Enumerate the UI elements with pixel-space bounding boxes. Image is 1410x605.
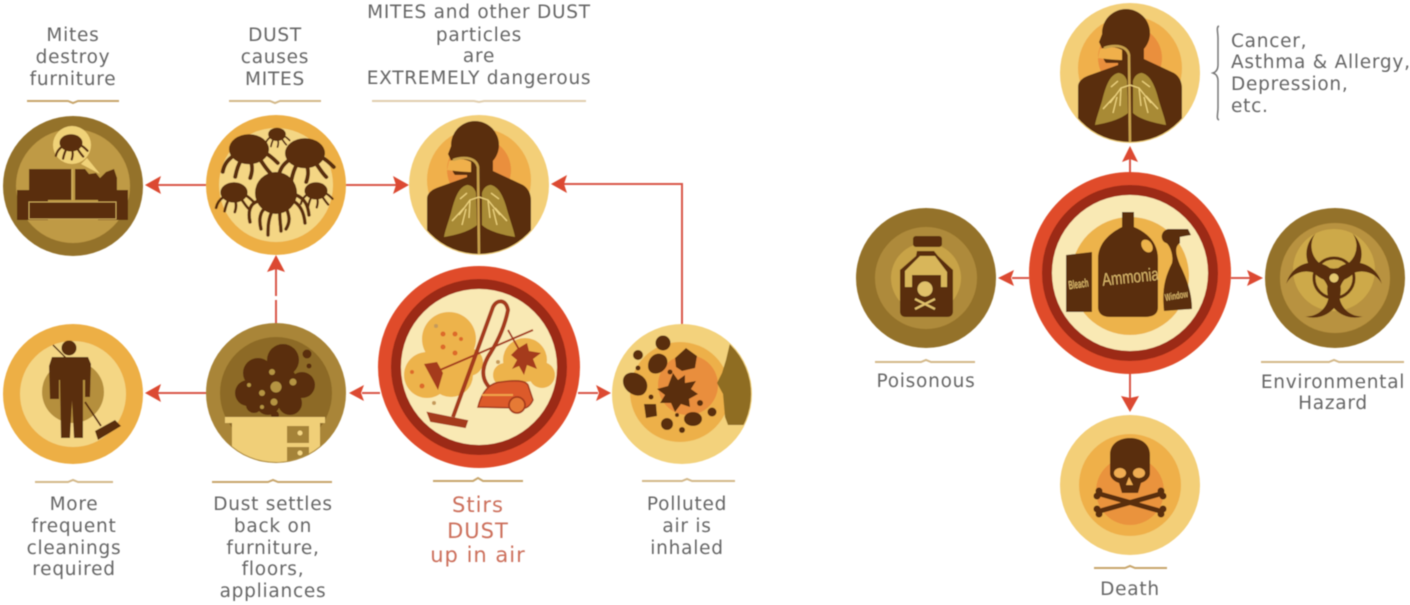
heading: mites destroy furniture: Mites <box>46 25 100 46</box>
arrow: dust causes mites to dangerous lungs <box>346 176 409 194</box>
icon: poison bottle <box>856 208 996 348</box>
arrow: dust causes mites to mites destroy furniture <box>145 176 206 194</box>
icon: dust mites <box>206 115 346 255</box>
arrow: chemicals to health <box>1122 146 1138 173</box>
text: more frequent cleanings: More <box>50 494 98 515</box>
heading: mites destroy furniture: furniture <box>30 69 116 90</box>
divider: dangerous label <box>372 101 586 102</box>
icon: biohazard <box>1265 208 1405 348</box>
divider: poisonous label <box>875 360 975 362</box>
text: health effects list: Cancer, <box>1231 31 1307 52</box>
divider: death label <box>1094 566 1167 568</box>
text: polluted air inhaled: air is <box>662 516 712 537</box>
text: health effects list: Asthma & Allergy, <box>1231 52 1410 73</box>
heading: mites extremely dangerous <box>367 2 591 89</box>
text: stirs dust up in air: DUST <box>447 519 509 543</box>
text: poisonous: Poisonous <box>876 371 976 392</box>
arrow: chemicals to poisonous <box>998 270 1029 286</box>
text: stirs dust up in air <box>430 493 526 567</box>
text: death: Death <box>1100 579 1160 600</box>
heading: dust causes mites <box>241 25 309 90</box>
arrow: dust settles to more cleanings <box>145 384 206 402</box>
text: stirs dust up in air: up in air <box>430 543 526 567</box>
text: health effects list <box>1231 31 1410 117</box>
icon: human lungs health effects <box>1060 3 1200 145</box>
text: dust settles: back on <box>234 516 312 537</box>
divider: stirs dust label <box>433 478 523 481</box>
divider: furniture label <box>27 101 119 103</box>
text: dust settles: Dust settles <box>213 494 333 515</box>
arrow: vacuum to polluted air <box>578 385 611 401</box>
icon: cleaning chemicals: Ammonia <box>1101 264 1161 290</box>
text: health effects list: etc. <box>1231 96 1269 117</box>
text: more frequent cleanings: frequent <box>32 516 116 537</box>
text: dust settles: appliances <box>220 581 326 602</box>
left flow diagram <box>3 2 757 602</box>
divider: environmental hazard label <box>1261 360 1404 362</box>
icon: cleaning chemicals <box>1029 172 1231 374</box>
heading: mites extremely dangerous: EXTREMELY dangerous <box>367 68 591 89</box>
heading: dust causes mites: MITES <box>245 69 305 90</box>
arrow: chemicals to environmental hazard <box>1231 270 1263 286</box>
text: polluted air inhaled: Polluted <box>647 494 727 515</box>
heading: dust causes mites: causes <box>241 47 309 68</box>
divider: polluted air label <box>642 479 735 481</box>
heading: mites destroy furniture <box>30 25 116 90</box>
icon: person cleaning <box>3 324 143 464</box>
heading: mites extremely dangerous: MITES and other DUST <box>367 2 591 23</box>
icon: sofa with mite <box>3 116 143 256</box>
text: dust settles <box>213 494 333 602</box>
divider: cleanings label <box>35 480 113 482</box>
icon: dust settled on furniture <box>206 323 346 463</box>
icon: polluted air inhaled <box>612 324 757 464</box>
arrow: dust settles up to mites <box>267 255 285 324</box>
heading: mites extremely dangerous: are <box>463 46 495 67</box>
right hub diagram <box>856 3 1410 600</box>
heading: dust causes mites: DUST <box>248 25 302 46</box>
arrow: vacuum to dust settles <box>349 385 380 401</box>
text: environmental hazard <box>1261 372 1405 414</box>
text: more frequent cleanings <box>27 494 121 580</box>
icon: cleaning chemicals: Window <box>1164 289 1189 304</box>
text: dust settles: floors, <box>242 559 304 580</box>
text: health effects list: Depression, <box>1231 74 1349 95</box>
divider: mites label <box>229 101 321 103</box>
text: more frequent cleanings: required <box>32 559 116 580</box>
text: stirs dust up in air: Stirs <box>452 493 504 517</box>
brace: health effects <box>1213 26 1219 120</box>
heading: mites extremely dangerous: particles <box>436 25 522 46</box>
text: polluted air inhaled <box>647 494 727 559</box>
icon: human lungs <box>409 115 549 257</box>
text: environmental hazard: Environmental <box>1261 372 1405 393</box>
text: dust settles: furniture, <box>226 538 320 559</box>
text: polluted air inhaled: inhaled <box>650 538 724 559</box>
text: more frequent cleanings: cleanings <box>27 538 121 559</box>
text: environmental hazard: Hazard <box>1298 393 1368 414</box>
arrow: polluted air to lungs <box>551 175 682 326</box>
heading: mites destroy furniture: destroy <box>36 47 110 68</box>
icon: vacuum cleaner stirring dust <box>378 266 580 468</box>
arrow: chemicals to death <box>1121 374 1139 412</box>
divider: dust settles label <box>212 480 332 482</box>
icon: cleaning chemicals: Bleach <box>1068 276 1089 292</box>
icon: skull and crossbones <box>1060 415 1200 555</box>
